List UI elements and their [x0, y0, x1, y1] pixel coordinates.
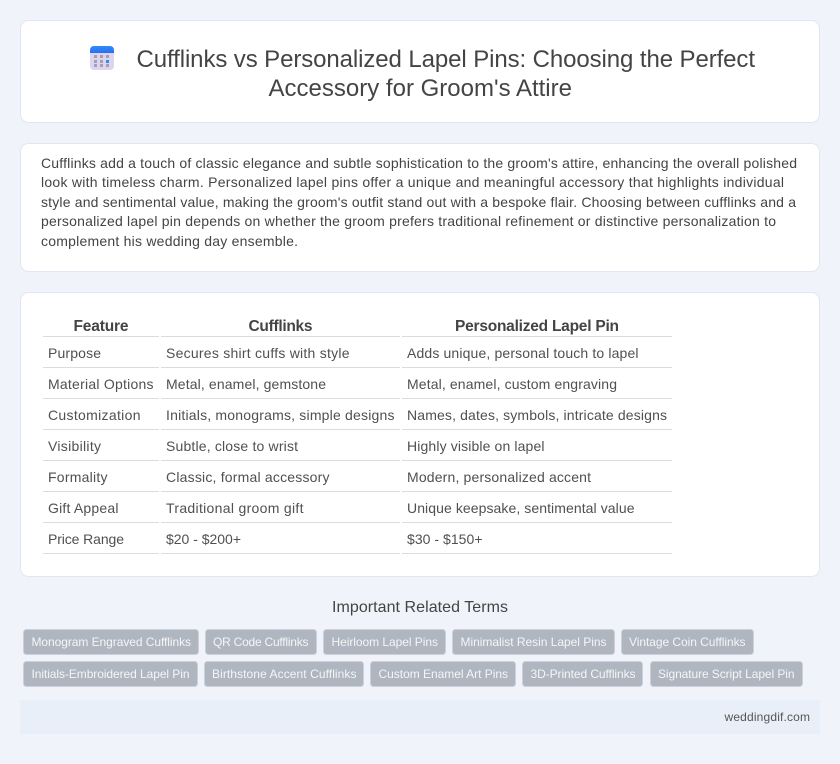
tag: Signature Script Lapel Pin	[658, 667, 794, 681]
tag	[206, 630, 316, 654]
row: purpose: Adds unique, personal touch to lapel	[407, 345, 638, 361]
row: gift appeal: Unique keepsake, sentimental value	[407, 500, 635, 516]
row: price range: $20 - $200+	[166, 531, 241, 547]
tag: 3D-Printed Cufflinks	[530, 667, 636, 681]
row: gift appeal: Traditional groom gift	[166, 500, 304, 516]
row: gift appeal: Gift Appeal	[48, 500, 118, 516]
table header row: Feature	[74, 318, 129, 335]
related terms heading: Important Related Terms	[332, 599, 508, 616]
tag	[650, 662, 802, 686]
footer	[20, 700, 820, 734]
icon: calendar	[90, 46, 114, 70]
table header row	[74, 318, 619, 335]
table rules	[43, 336, 672, 554]
tag	[622, 630, 754, 654]
tag: Minimalist Resin Lapel Pins	[460, 635, 606, 649]
title: Cufflinks vs Personalized Lapel Pins: Choosing the Perfect	[136, 46, 755, 73]
row: price range	[48, 531, 482, 547]
header panel	[20, 20, 820, 122]
row: visibility: Highly visible on lapel	[407, 438, 544, 454]
tag: Initials-Embroidered Lapel Pin	[32, 667, 190, 681]
panel: description	[20, 144, 820, 272]
row: visibility: Visibility	[48, 438, 101, 454]
row: formality: Classic, formal accessory	[166, 469, 330, 485]
tag: QR Code Cufflinks	[213, 635, 308, 649]
row: visibility	[48, 438, 544, 454]
row: customization: Initials, monograms, simple designs	[166, 407, 394, 423]
title: Accessory for Groom's Attire	[268, 75, 572, 102]
description paragraph: complement his wedding day ensemble.	[41, 233, 298, 249]
tag	[452, 630, 614, 654]
row: purpose	[48, 345, 638, 361]
row: purpose: Secures shirt cuffs with style	[166, 345, 350, 361]
tag	[522, 662, 642, 686]
tag	[24, 630, 198, 654]
row: formality: Modern, personalized accent	[407, 469, 591, 485]
row: price range: $30 - $150+	[407, 531, 482, 547]
row: material options: Metal, enamel, custom engraving	[407, 376, 617, 392]
related terms tags	[24, 630, 802, 686]
row: formality	[48, 469, 591, 485]
row: customization: Names, dates, symbols, intricate designs	[407, 407, 667, 423]
table header row: Personalized Lapel Pin	[455, 318, 619, 335]
tag	[204, 662, 364, 686]
row: visibility: Subtle, close to wrist	[166, 438, 298, 454]
tag: Vintage Coin Cufflinks	[629, 635, 746, 649]
description paragraph: personalized lapel pin depends on whether the groom prefers traditional refinement or distinctive personalization to	[41, 213, 776, 229]
row: customization	[48, 407, 667, 423]
tag: Heirloom Lapel Pins	[332, 635, 438, 649]
tag: Monogram Engraved Cufflinks	[32, 635, 191, 649]
panel: comparison table	[20, 292, 820, 576]
row: purpose: Purpose	[48, 345, 101, 361]
description paragraph: style and sentimental value, making the groom's outfit stand out with a bespoke flair. Choosing between cufflinks and a	[41, 194, 796, 210]
row: formality: Formality	[48, 469, 108, 485]
row: gift appeal	[48, 500, 635, 516]
footer: weddingdif.com	[724, 710, 810, 724]
row: material options: Material Options	[48, 376, 154, 392]
row: price range: Price Range	[48, 531, 124, 547]
row: customization: Customization	[48, 407, 140, 423]
description paragraph: Cufflinks add a touch of classic elegance and subtle sophistication to the groom's attire, enhancing the overall polished	[41, 155, 797, 171]
tag	[24, 662, 198, 686]
tag: Birthstone Accent Cufflinks	[212, 667, 356, 681]
row: material options: Metal, enamel, gemstone	[166, 376, 326, 392]
description paragraph: look with timeless charm. Personalized lapel pins offer a unique and meaningful accessory that highlights individual	[41, 174, 784, 190]
tag	[324, 630, 446, 654]
row: material options	[48, 376, 617, 392]
tag: Custom Enamel Art Pins	[378, 667, 508, 681]
tag	[370, 662, 516, 686]
table header row: Cufflinks	[248, 318, 312, 335]
